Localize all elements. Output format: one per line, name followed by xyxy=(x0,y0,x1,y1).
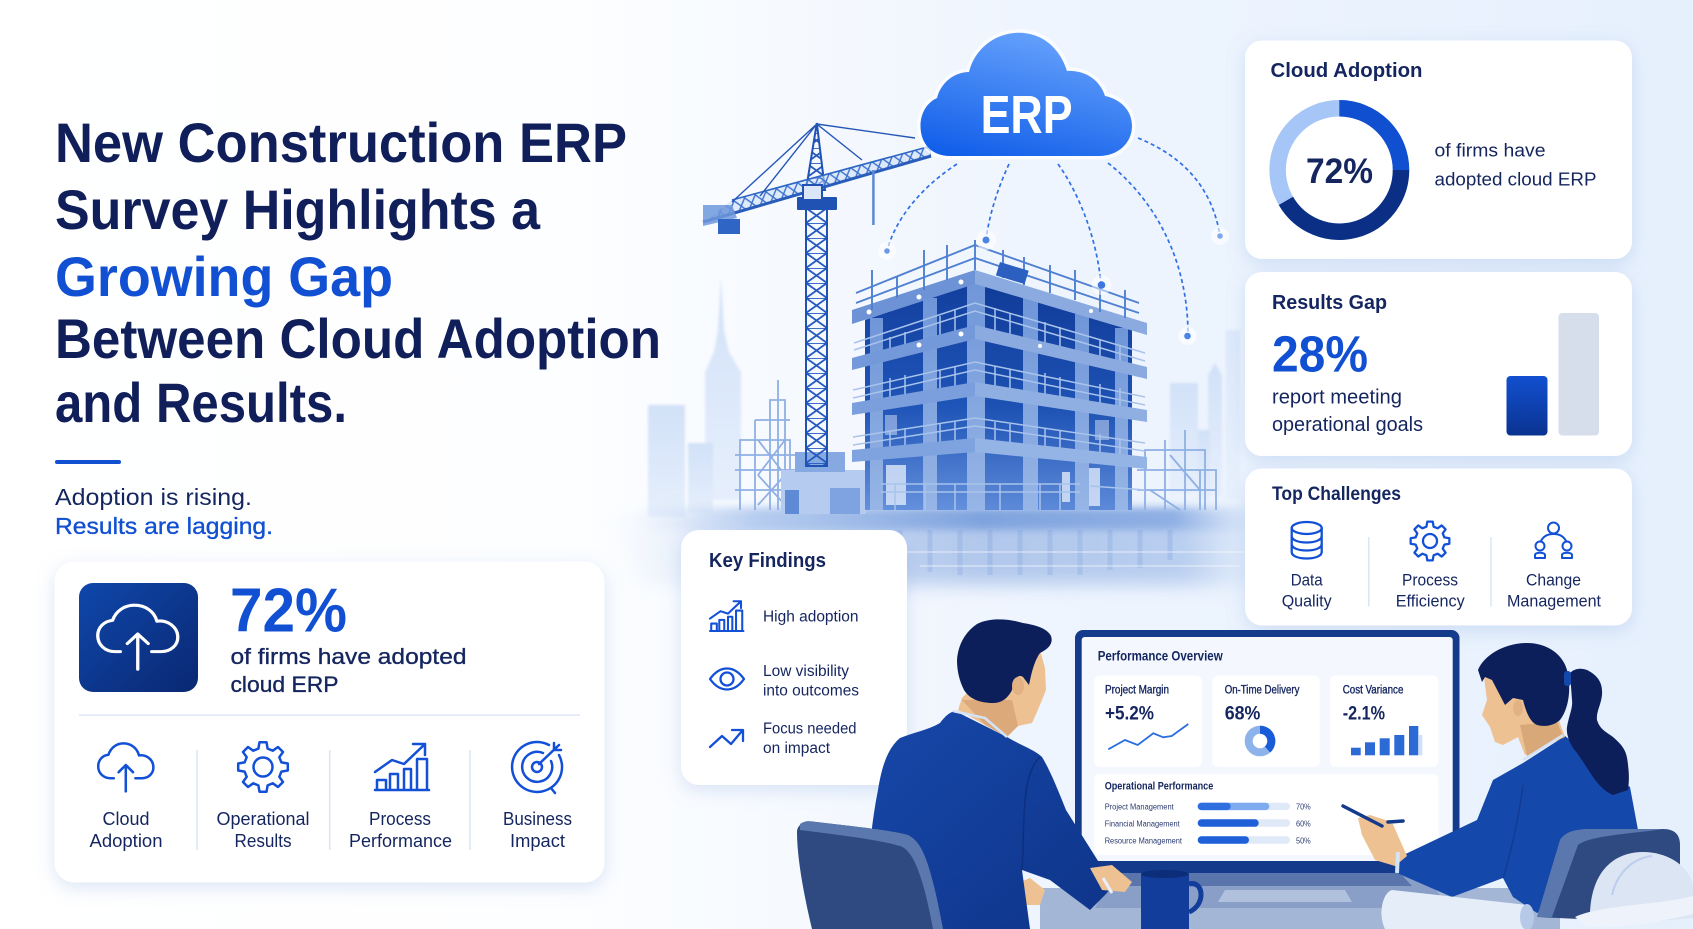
stat description: cloud ERP xyxy=(230,672,338,697)
illustration: woman with pen xyxy=(1358,643,1638,913)
face and neck xyxy=(958,640,1046,737)
ground band xyxy=(600,508,1290,585)
icon: trend arrow xyxy=(710,730,743,747)
card: cost variance: Cost Variance xyxy=(1343,684,1403,696)
finding: focus needed xyxy=(763,720,856,757)
crane base block xyxy=(781,452,866,514)
scaffolding xyxy=(735,380,1216,510)
finding: focus needed: Focus needed xyxy=(763,720,856,738)
connection nodes xyxy=(878,227,1229,345)
card: project margin xyxy=(1094,676,1202,767)
hair xyxy=(957,619,1052,703)
suit xyxy=(867,711,1111,929)
description xyxy=(1434,140,1596,190)
card: on-time delivery xyxy=(1212,676,1320,767)
man's chair xyxy=(797,821,943,929)
challenge labels: Efficiency xyxy=(1396,592,1465,610)
icon: process chart xyxy=(375,744,429,790)
description: adopted cloud ERP xyxy=(1434,168,1596,190)
card: operational performance: 70% xyxy=(1296,802,1311,811)
icon: high adoption chart xyxy=(710,601,743,631)
challenge labels: Process xyxy=(1402,570,1458,590)
icon labels: Performance xyxy=(349,830,452,851)
slabs xyxy=(852,270,975,324)
woman's chair xyxy=(1537,829,1680,920)
facade xyxy=(865,282,975,510)
site lights xyxy=(866,280,1093,348)
heading: top challenges: Top Challenges xyxy=(1272,484,1401,505)
icon labels xyxy=(90,808,572,851)
subtitle: Adoption is rising. xyxy=(55,484,252,510)
ERP cloud xyxy=(920,33,1132,156)
icon: process gear xyxy=(1411,522,1449,560)
title: New Construction ERP xyxy=(55,111,627,174)
lower hand xyxy=(1013,878,1045,905)
description xyxy=(1272,386,1423,436)
monitor dashboard xyxy=(1075,630,1460,873)
description: report meeting xyxy=(1272,386,1402,408)
icon labels: Business xyxy=(503,808,572,829)
panel: key findings xyxy=(681,530,907,785)
title: Growing Gap xyxy=(55,245,393,308)
columns xyxy=(870,280,1128,510)
card: on-time delivery: On-Time Delivery xyxy=(1225,684,1300,696)
title: Survey Highlights a xyxy=(55,178,541,241)
finding: high adoption: High adoption xyxy=(763,608,858,626)
finding: focus needed: on impact xyxy=(763,740,831,757)
finding: low visibility: Low visibility xyxy=(763,663,849,680)
openings xyxy=(885,415,1109,506)
card: operational performance: Project Management xyxy=(1105,802,1174,811)
title: and Results. xyxy=(55,371,347,434)
ear xyxy=(1513,700,1523,716)
panel: top challenges xyxy=(1245,468,1632,626)
heading: performance overview: Performance Overview xyxy=(1098,648,1223,664)
card: operational performance: Operational Performance xyxy=(1105,780,1213,792)
challenge labels: Data xyxy=(1291,570,1323,590)
description: operational goals xyxy=(1272,414,1423,436)
hard hat xyxy=(1575,852,1693,927)
pen xyxy=(1343,806,1403,826)
stat description xyxy=(230,644,466,697)
icon labels: Process xyxy=(369,808,431,829)
illustration: man at desk xyxy=(867,619,1132,929)
card: operational performance: 50% xyxy=(1296,836,1311,845)
crane xyxy=(703,123,931,466)
subtitle xyxy=(55,484,273,539)
card: operational performance xyxy=(1094,774,1438,855)
card: operational performance: Financial Management xyxy=(1105,819,1180,828)
skyline xyxy=(648,277,1240,517)
bar chart xyxy=(1506,313,1599,436)
panel: adoption summary xyxy=(54,562,604,882)
description: of firms have xyxy=(1434,140,1546,160)
subtitle: Results are lagging. xyxy=(55,513,273,539)
ERP cloud: ERP xyxy=(981,85,1073,145)
roof railing xyxy=(856,240,1139,318)
network connections xyxy=(887,138,1220,335)
hand xyxy=(1090,865,1132,892)
icon: business target xyxy=(512,742,562,793)
title xyxy=(55,111,661,434)
ear xyxy=(1012,677,1024,695)
icon labels: Results xyxy=(234,830,292,851)
card: operational performance: Resource Management xyxy=(1105,836,1183,845)
collar xyxy=(953,711,1007,737)
card: on-time delivery: 68% xyxy=(1225,702,1260,724)
icon labels: Cloud xyxy=(102,808,150,829)
icon: coffee mug xyxy=(1141,870,1201,929)
icon: change management people xyxy=(1535,522,1572,558)
challenge labels: Change xyxy=(1526,570,1581,590)
icon: cloud adoption xyxy=(98,743,153,791)
icon: cloud upload tile xyxy=(79,583,198,692)
challenge labels: Management xyxy=(1507,592,1601,610)
icon: eye xyxy=(710,668,744,690)
ponytail xyxy=(1567,669,1629,795)
icon labels: Adoption xyxy=(90,830,162,851)
heading: cloud adoption: Cloud Adoption xyxy=(1270,59,1422,82)
title: Between Cloud Adoption xyxy=(55,307,661,370)
card: cost variance: -2.1% xyxy=(1343,702,1385,724)
panel: cloud adoption xyxy=(1245,40,1632,259)
hand and cuff xyxy=(1358,815,1407,866)
face and neck xyxy=(1482,665,1565,755)
blueprint roll xyxy=(1381,890,1534,929)
stat: 72%: 72% xyxy=(230,576,347,646)
donut chart xyxy=(1278,108,1401,232)
heading: key findings: Key Findings xyxy=(709,549,826,572)
hair xyxy=(1478,643,1569,726)
icon: database xyxy=(1292,522,1322,558)
card: cost variance xyxy=(1330,676,1438,767)
suit xyxy=(1397,736,1638,913)
finding: low visibility: into outcomes xyxy=(763,682,859,700)
panel: results gap xyxy=(1245,272,1632,456)
challenge labels xyxy=(1282,570,1601,610)
donut value: 72% xyxy=(1306,152,1373,191)
challenge labels: Quality xyxy=(1282,592,1332,610)
stat description: of firms have adopted xyxy=(230,644,466,669)
building under construction xyxy=(852,240,1147,510)
icon labels: Impact xyxy=(510,830,565,851)
card: operational performance: 60% xyxy=(1296,819,1311,828)
card: project margin: +5.2% xyxy=(1105,702,1154,724)
finding: low visibility xyxy=(763,663,859,700)
icon: operational gear xyxy=(238,742,288,792)
heading: results gap: Results Gap xyxy=(1272,291,1387,314)
collar xyxy=(1523,735,1563,760)
stat: 28%: 28% xyxy=(1272,326,1368,382)
accent rule xyxy=(55,460,121,464)
railings xyxy=(853,303,1145,510)
desk and laptop xyxy=(1040,870,1560,929)
card: project margin: Project Margin xyxy=(1105,684,1169,696)
icon labels: Operational xyxy=(216,808,310,829)
